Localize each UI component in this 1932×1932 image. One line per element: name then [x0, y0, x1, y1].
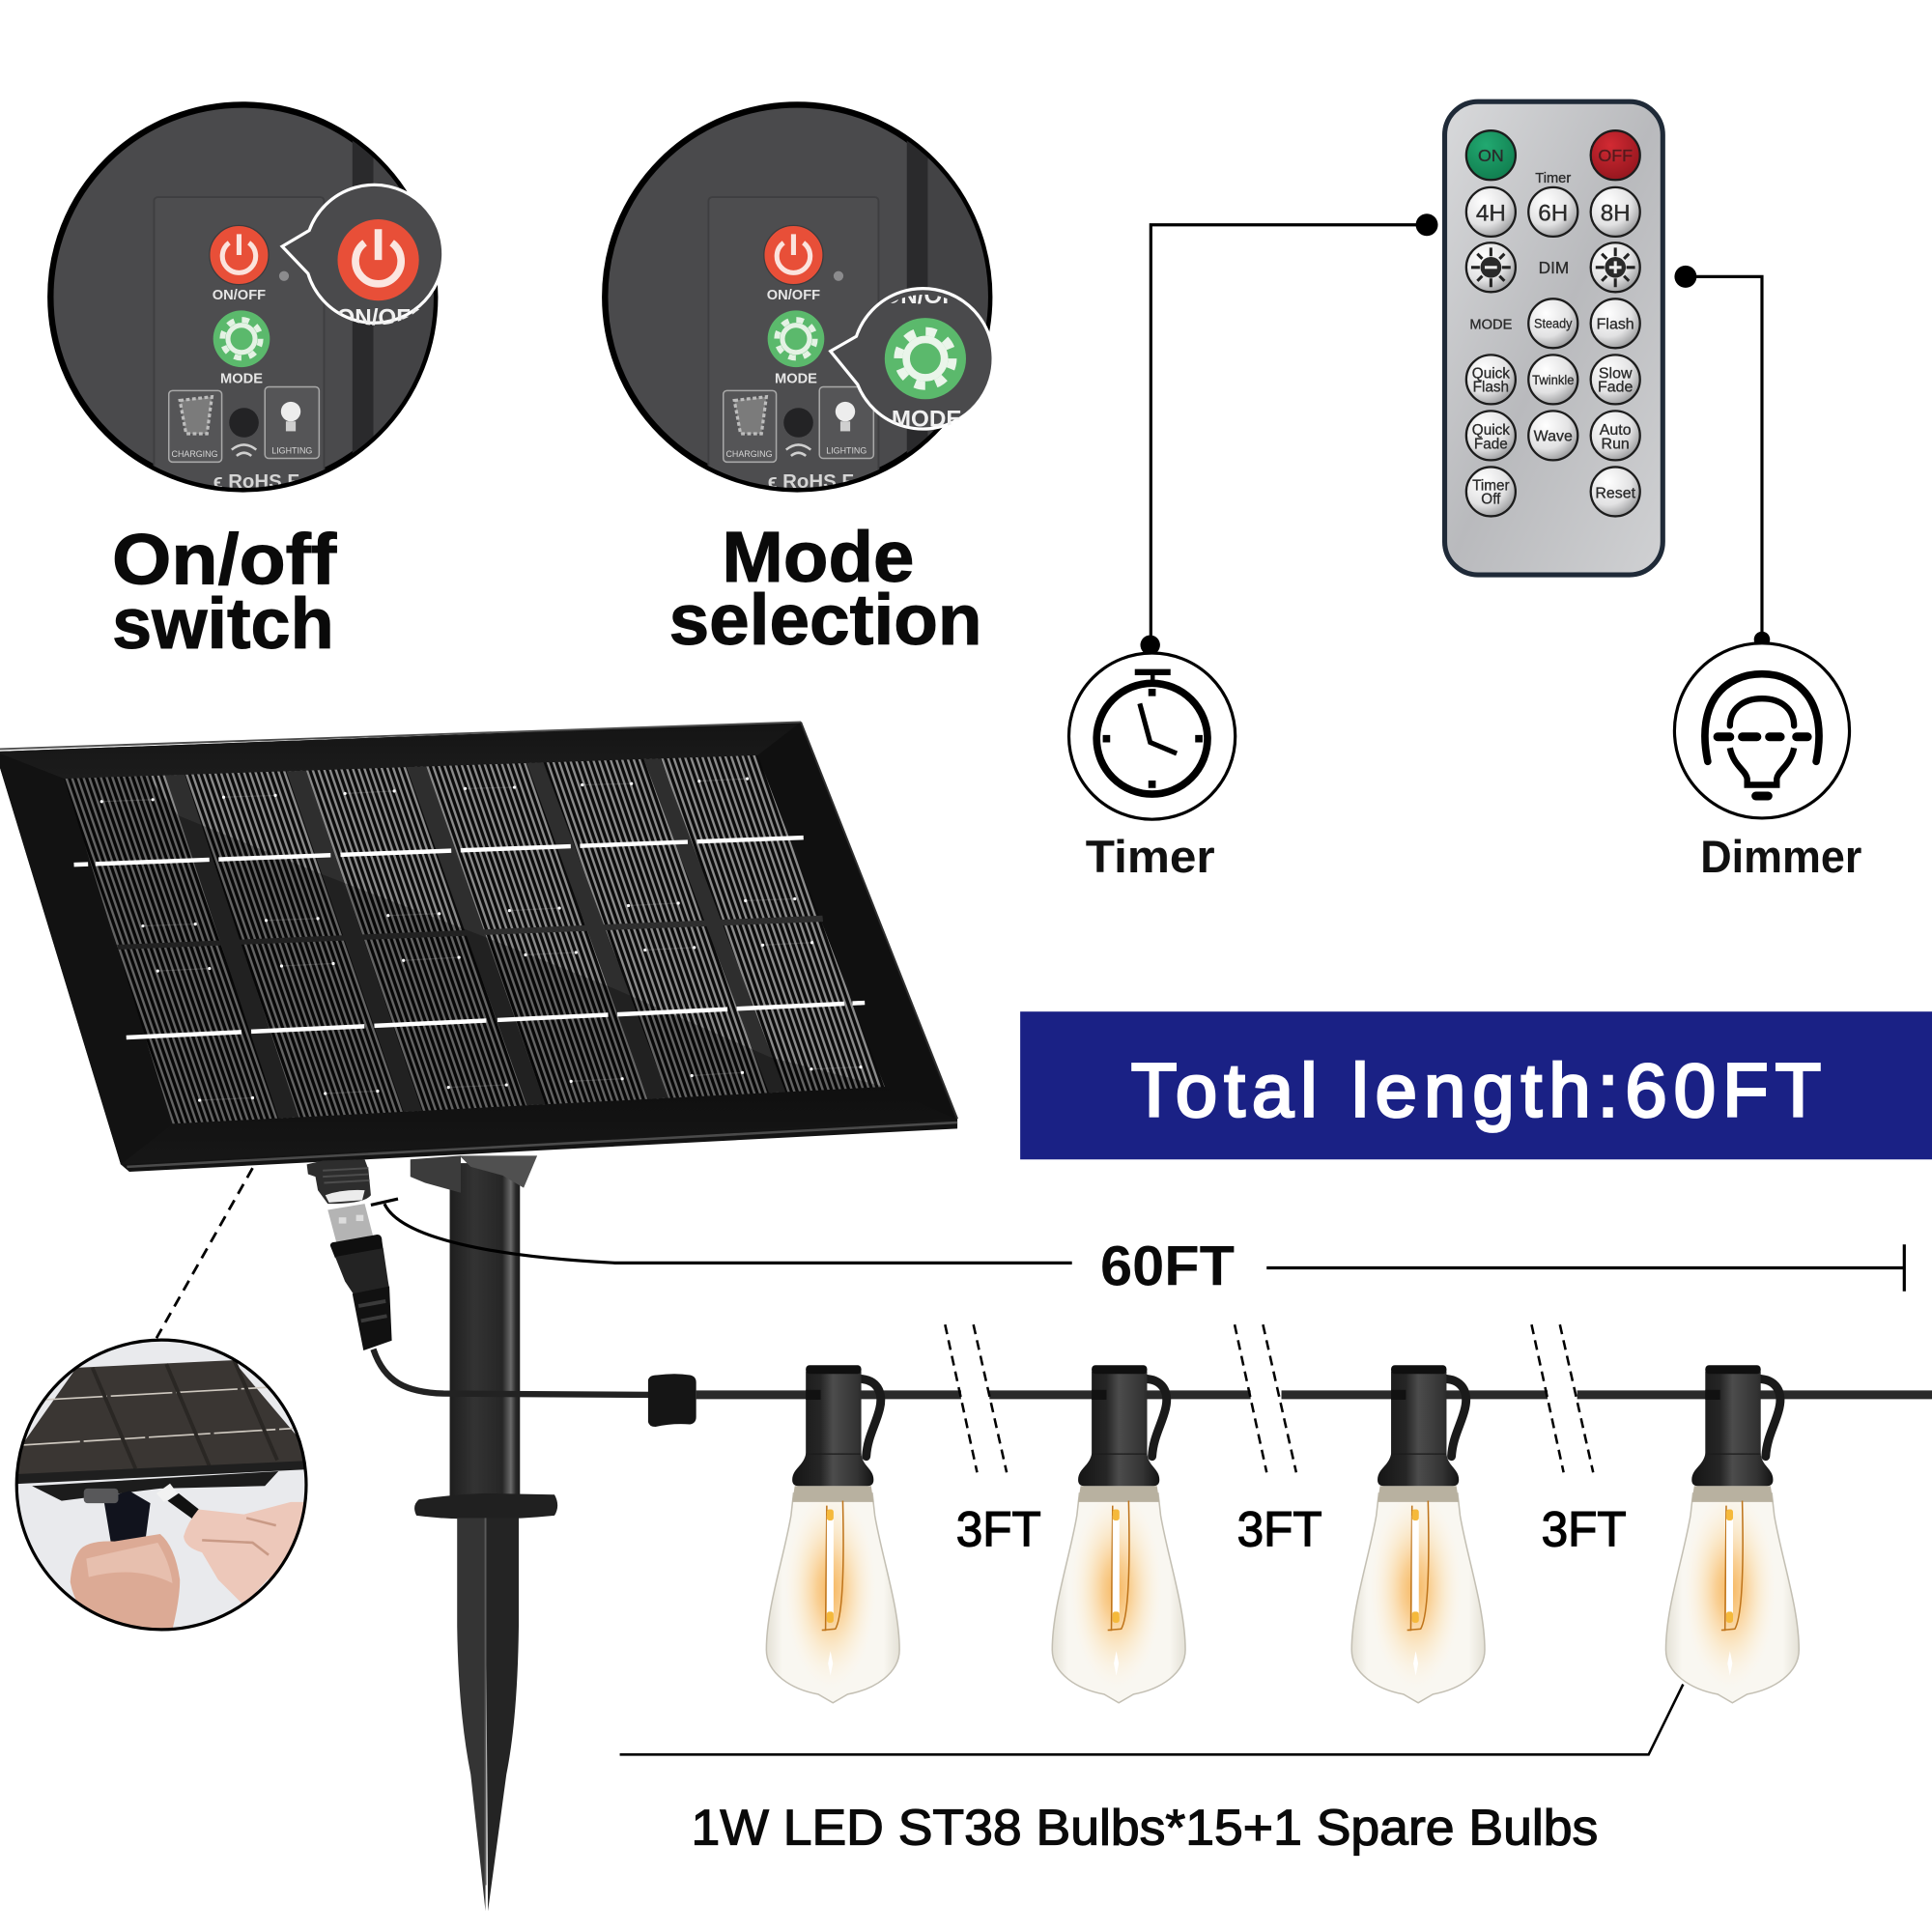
- control box photo circle: ON/OFF: [767, 288, 820, 303]
- remote labels: Quick: [1472, 366, 1510, 383]
- control box photo circle: MODE: [775, 372, 817, 387]
- icon: timer stopwatch: [1069, 653, 1236, 819]
- banner: total length: Total length:60FT: [1131, 1050, 1821, 1133]
- bulb 4: [1665, 1365, 1799, 1703]
- dim plus icon: [1596, 247, 1635, 287]
- caption: bulb specification: 1W LED ST38 Bulbs*15+1 Spare Bulbs: [692, 1800, 1598, 1856]
- stake column: [450, 1163, 520, 1503]
- remote labels: Steady: [1534, 315, 1573, 330]
- stake spike: [457, 1518, 519, 1911]
- remote labels: Quick: [1472, 422, 1510, 439]
- label: 60FT: 60FT: [1100, 1235, 1235, 1297]
- control box photo circle: MODE: [220, 372, 263, 387]
- remote labels: Auto: [1600, 422, 1632, 439]
- remote labels: [1469, 146, 1636, 508]
- heading: on/off switch: [112, 520, 337, 664]
- control box photo circle: [50, 86, 447, 505]
- heading: on/off switch: On/off: [112, 520, 337, 600]
- icon: dimmer bulb: [1674, 643, 1850, 818]
- leader line to bulb: [620, 1685, 1683, 1754]
- dimension line: 60FT right arm: [1266, 1244, 1904, 1292]
- remote control: [1445, 101, 1662, 575]
- remote labels: 6H: [1538, 200, 1568, 226]
- control box photo circle: ϵ RoHS F: [213, 471, 299, 493]
- remote labels: Run: [1602, 436, 1630, 452]
- control box photo circle: LIGHTING: [271, 445, 312, 455]
- cell contact dots: [101, 779, 861, 1100]
- cord coupler: [648, 1374, 696, 1427]
- connector line: remote to timer: [1140, 213, 1438, 655]
- remote labels: Slow: [1599, 366, 1633, 383]
- inset: plugging in the usb cable: [15, 1339, 308, 1631]
- dim minus icon: [1471, 247, 1511, 287]
- solar cells: [64, 755, 885, 1123]
- heading: on/off switch: switch: [112, 583, 334, 664]
- magnifier bubble: mode button: ON/OFF: [882, 283, 971, 309]
- label: 3FT spacing 3: 3FT: [1542, 1502, 1627, 1557]
- remote labels: Wave: [1534, 429, 1573, 445]
- bulb 3: [1351, 1365, 1485, 1703]
- magnifier bubble: on/off button: ON/OFF: [336, 305, 425, 331]
- remote labels: Timer: [1472, 478, 1510, 495]
- bus bars: [74, 838, 866, 1037]
- control box photo circle: LIGHTING: [826, 445, 867, 455]
- cable from plug to first socket: [373, 1350, 653, 1395]
- string cord: [696, 1391, 1932, 1398]
- remote labels: 8H: [1601, 200, 1631, 226]
- control box photo circle: ϵ RoHS F: [768, 471, 854, 493]
- heading: mode selection: Mode: [722, 517, 914, 597]
- dashed leader to inset: [156, 1168, 252, 1338]
- remote buttons: [1466, 130, 1640, 516]
- usb socket on panel: [307, 1159, 371, 1204]
- label: 3FT spacing 2: 3FT: [1237, 1502, 1322, 1557]
- label: 3FT spacing 1: 3FT: [956, 1502, 1041, 1557]
- remote labels: Twinkle: [1532, 372, 1575, 387]
- control box photo circle: ON/OFF: [213, 288, 266, 303]
- solar panel: [0, 722, 957, 1172]
- remote labels: MODE: [1469, 318, 1513, 333]
- callout line: 60FT left arm: [371, 1199, 1072, 1263]
- bulb 1: [766, 1365, 899, 1703]
- panel: on/off switch close-up: [50, 86, 447, 505]
- magnifier bubble: mode button: [831, 283, 993, 432]
- label: dimmer: Dimmer: [1700, 832, 1861, 883]
- mounting bracket: [411, 1155, 537, 1193]
- magnifier bubble: on/off button: [282, 185, 443, 331]
- connector line: remote to dimmer: [1674, 266, 1770, 647]
- remote labels: ON: [1478, 146, 1504, 165]
- panel frame: [0, 722, 957, 1172]
- remote labels: OFF: [1598, 146, 1633, 165]
- magnifier bubble: mode button: MODE: [892, 406, 962, 432]
- control box photo circle: CHARGING: [172, 449, 218, 459]
- remote labels: Flash: [1597, 317, 1634, 333]
- remote labels: Timer: [1535, 171, 1571, 186]
- remote labels: Flash: [1473, 380, 1509, 396]
- remote labels: DIM: [1539, 258, 1569, 277]
- usb plug: [327, 1204, 392, 1350]
- break marks: [945, 1324, 1593, 1472]
- control box photo circle: CHARGING: [726, 449, 773, 459]
- label: timer: Timer: [1086, 832, 1215, 883]
- glass reflection shadow: [64, 777, 885, 1123]
- stake flange: [414, 1493, 557, 1520]
- bulb 2: [1052, 1365, 1185, 1703]
- remote labels: Fade: [1474, 436, 1508, 452]
- solar panel stake: [411, 1155, 557, 1911]
- heading: mode selection: selection: [669, 580, 982, 660]
- remote labels: Off: [1481, 492, 1501, 508]
- remote labels: Fade: [1598, 380, 1633, 396]
- banner: total length: [1020, 1011, 1932, 1159]
- remote labels: 4H: [1476, 200, 1506, 226]
- heading: mode selection: [669, 517, 982, 660]
- remote labels: Reset: [1595, 485, 1636, 501]
- control box photo circle: [605, 86, 1002, 505]
- cell gaps: [117, 758, 823, 1119]
- panel: mode selection close-up: [605, 86, 1002, 505]
